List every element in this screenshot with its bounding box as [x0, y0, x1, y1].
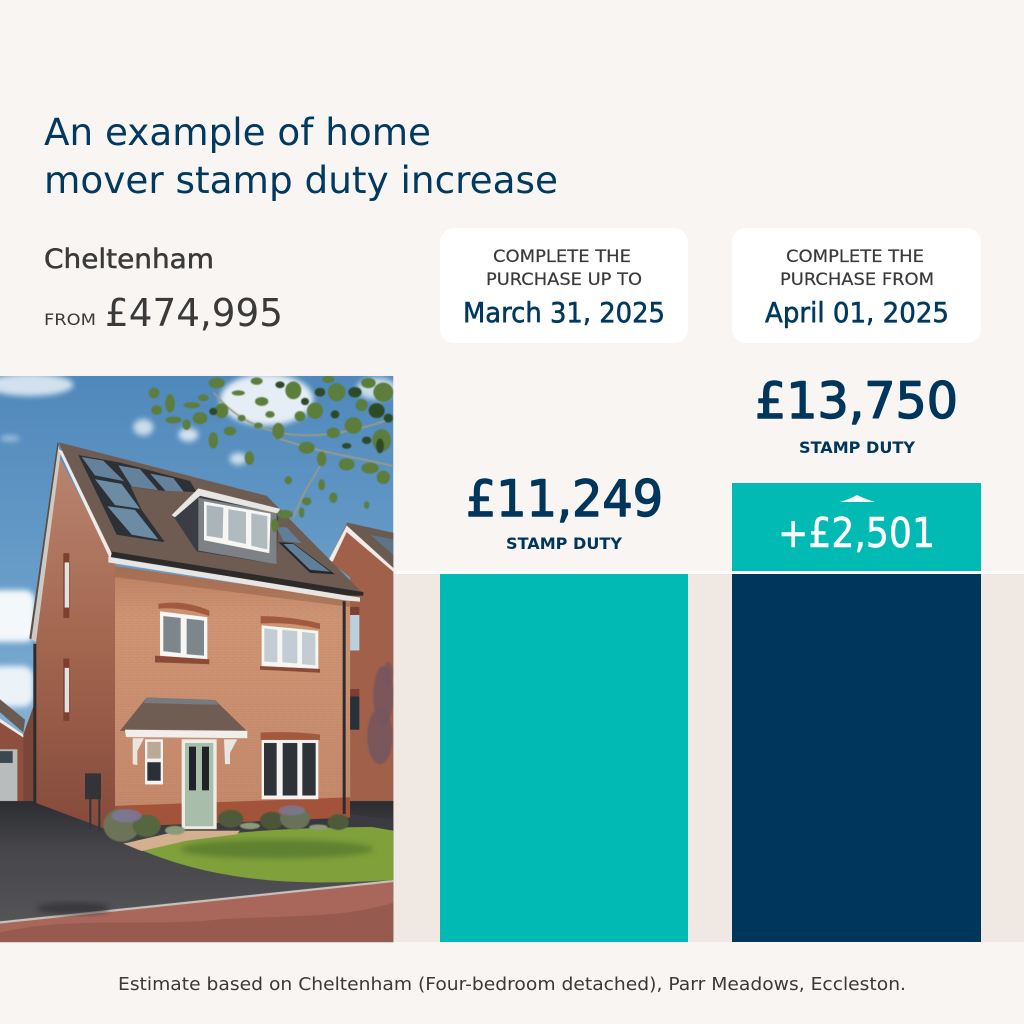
value: before: £11,249 — [466, 470, 663, 528]
date card: up to March 31: COMPLETE THE — [493, 247, 631, 267]
date card: from April 01: April 01, 2025 — [765, 296, 949, 329]
house side wall — [29, 442, 115, 832]
value: before: STAMP DUTY — [506, 534, 622, 553]
title: An example of home — [44, 111, 431, 154]
value: after: £13,750 — [755, 372, 958, 430]
shrubs — [103, 805, 349, 842]
value: after: STAMP DUTY — [799, 438, 915, 457]
date card: from April 01: PURCHASE FROM — [780, 270, 934, 290]
house front wall — [115, 566, 350, 827]
date card: up to March 31 — [440, 228, 688, 343]
date card: up to March 31: PURCHASE UP TO — [486, 270, 642, 290]
tree foliage — [149, 376, 393, 532]
date card: from April 01: COMPLETE THE — [786, 247, 924, 267]
dormer — [172, 488, 280, 564]
increase block: +£2,501 — [778, 509, 935, 557]
price: FROM — [44, 310, 96, 329]
value: before — [466, 470, 663, 553]
roof — [58, 442, 363, 602]
front door — [182, 739, 217, 829]
ground floor windows — [145, 732, 320, 799]
value: after — [755, 372, 958, 457]
bar: after — [732, 574, 981, 942]
title — [44, 111, 558, 202]
baseline divider — [393, 571, 1024, 574]
house type name: Cheltenham — [44, 244, 214, 275]
upper windows — [155, 603, 320, 673]
bar: before — [440, 574, 688, 942]
date card: up to March 31: March 31, 2025 — [463, 296, 665, 329]
photo: detached house — [0, 374, 397, 942]
porch canopy — [120, 697, 247, 765]
footnote: Estimate based on Cheltenham (Four-bedroom detached), Parr Meadows, Eccleston. — [118, 974, 906, 995]
background house right — [328, 522, 393, 820]
chart background band — [393, 574, 1024, 942]
title: mover stamp duty increase — [44, 159, 558, 202]
increase block — [732, 483, 981, 571]
ground — [0, 801, 393, 942]
price: £474,995 — [105, 291, 283, 335]
date card: from April 01 — [732, 228, 981, 343]
background house left — [0, 699, 37, 803]
